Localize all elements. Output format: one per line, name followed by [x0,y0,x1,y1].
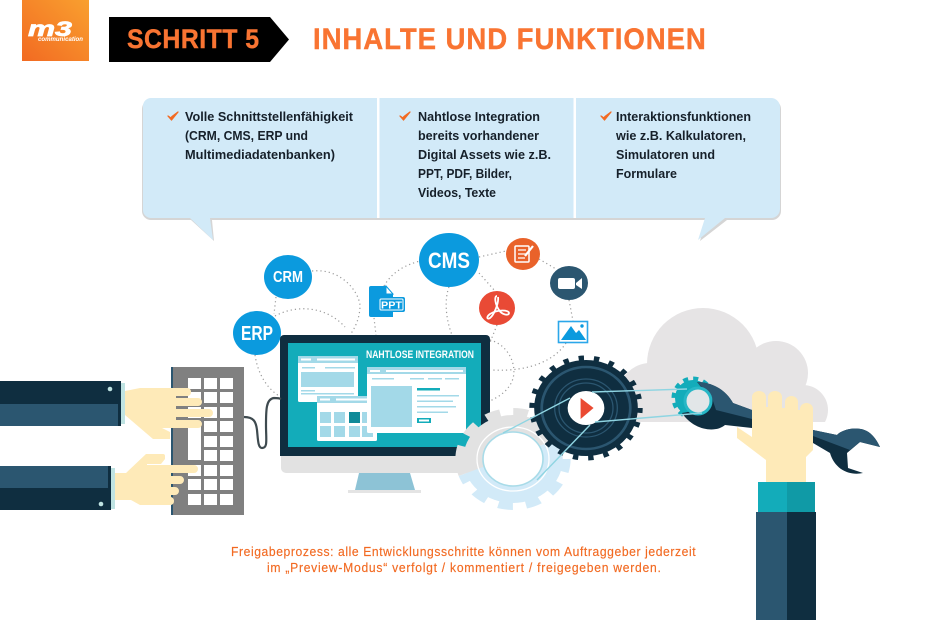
title: INHALTE UND FUNKTIONEN [313,23,706,56]
speech bubble panel [142,98,781,241]
window 3 [367,367,466,433]
bubble column 1: Volle Schnittstellenfähigkeit [185,109,354,124]
bubble column 2: PPT, PDF, Bilder, [418,166,512,181]
cog ring [685,388,711,414]
footer note: im „Preview-Modus“ verfolgt / kommentiert / freigegeben werden. [267,561,661,575]
dotted connection lines [255,251,573,401]
icon: PDF [479,291,515,325]
circle: ERP [233,311,281,355]
bubble column 3: Formulare [616,166,677,181]
window 2 [317,396,377,441]
icon: video camera [550,266,588,300]
circle: CRM: CRM [273,269,303,286]
footer note: Freigabeprozess: alle Entwicklungsschritte können vom Auftraggeber jederzeit [231,545,696,559]
cable [244,398,281,448]
upper left hand [125,388,213,439]
bubble column 2 [400,109,551,200]
monitor [280,335,490,493]
icon: PPT document [369,286,405,317]
upper left arm [0,381,125,426]
step badge: Schritt 5 [109,17,289,62]
bubble column 1: (CRM, CMS, ERP und [185,128,308,143]
bubble column 1: Multimediadatenbanken) [185,147,335,162]
right arm sleeve [756,482,816,620]
logo: m3 communication [22,0,89,61]
bubble column 2: Digital Assets wie z.B. [418,147,551,162]
step badge: Schritt 5: SCHRITT 5 [127,25,259,54]
dark gear with play button [532,358,640,458]
belts [503,389,702,480]
circle: CMS [419,233,479,287]
wrench [682,382,880,474]
right hand holding wrench [737,391,813,482]
bubble column 3: Interaktionsfunktionen [616,109,751,124]
bubble column 2: Videos, Texte [418,185,496,200]
bubble column 2: bereits vorhandener [418,128,539,143]
footer note [231,545,696,575]
circle: CRM [264,255,312,299]
circle: ERP: ERP [241,323,273,345]
circle: CMS: CMS [428,248,470,273]
logo: m3 communication: m3 [28,18,72,41]
icon: form notes [506,238,540,270]
monitor stand [348,473,421,493]
play icon [581,398,594,419]
bubble column 3: Simulatoren und [616,147,715,162]
bubble column 3 [601,109,751,181]
logo: m3 communication: communication [38,37,83,43]
bubble column 3: wie z.B. Kalkulatoren, [615,128,746,143]
lower left arm [0,466,115,510]
lower left hand [115,454,198,505]
teal cog [674,379,712,417]
bubble column 2: Nahtlose Integration [418,109,540,124]
bubble column 1 [168,109,354,162]
cloud [625,308,828,422]
light gear [460,412,566,506]
window 1 [298,356,358,402]
keyboard [171,367,244,515]
icon: PPT document: PPT [381,300,402,312]
screen heading: NAHTLOSE INTEGRATION [366,349,474,361]
icon: image [558,322,588,342]
